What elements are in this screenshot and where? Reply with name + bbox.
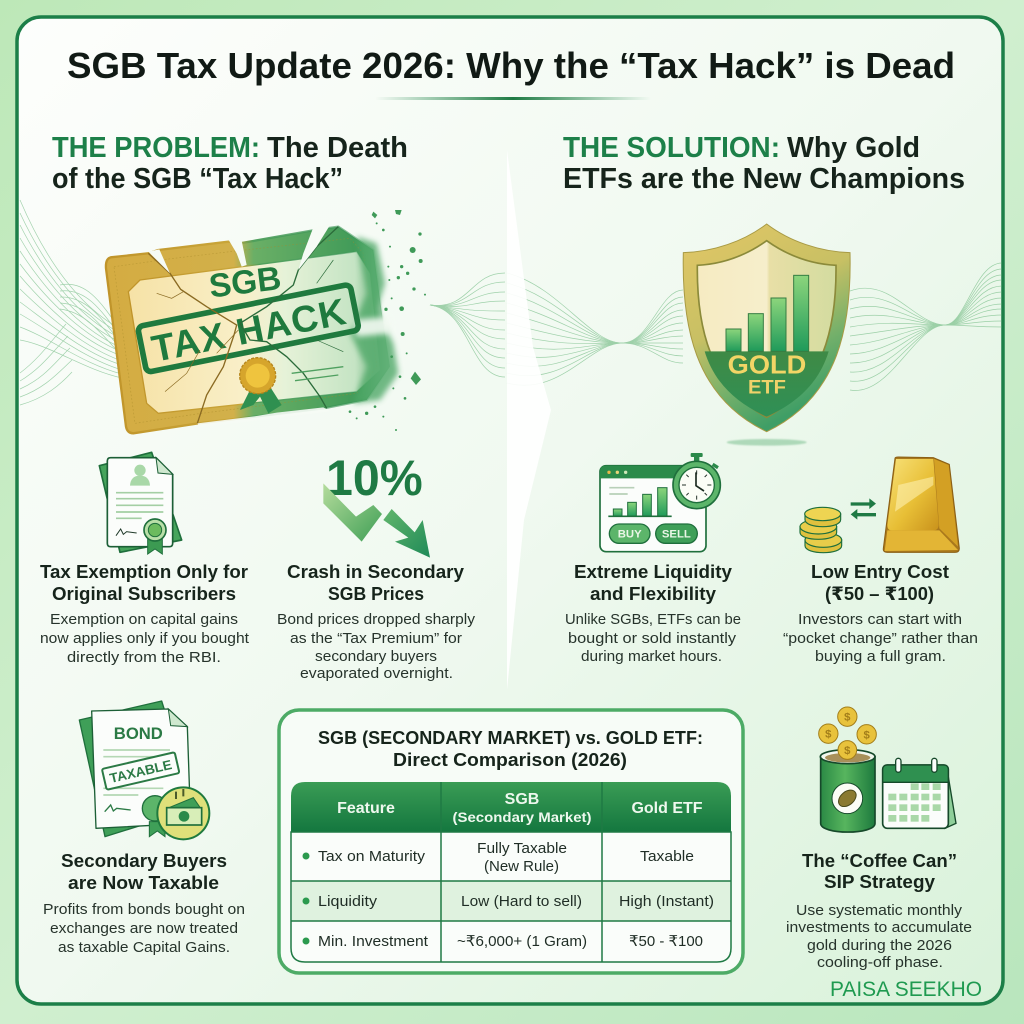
text: extreme liquidity bbox=[565, 561, 741, 665]
table row: liquidity: Low (Hard to sell) bbox=[461, 893, 582, 910]
text: crash in prices: secondary buyers bbox=[315, 649, 437, 665]
heading: the solution: THE SOLUTION: bbox=[563, 132, 780, 164]
icon: taxable bond: TAXABLE bbox=[108, 757, 173, 786]
text: tax exemption: Exemption on capital gains bbox=[50, 612, 238, 628]
text: secondary buyers: Profits from bonds bought on bbox=[43, 902, 245, 918]
icon: coffee can and calendar: $ bbox=[844, 745, 851, 757]
text: low entry cost: buying a full gram. bbox=[815, 649, 946, 665]
text: crash in prices: Bond prices dropped sharply bbox=[277, 612, 476, 628]
text: low entry cost: Low Entry Cost bbox=[811, 561, 949, 582]
icon: 10 percent crash bbox=[323, 450, 430, 558]
table row: min investment: Min. Investment bbox=[318, 933, 429, 950]
illustration: torn SGB tax hack certificate bbox=[106, 210, 426, 433]
title: SGB Tax Update 2026: Why the “Tax Hack” is Dead bbox=[67, 45, 955, 86]
shatter particles bbox=[349, 210, 426, 431]
table row: tax on maturity: Fully Taxable bbox=[477, 840, 567, 857]
table header row bbox=[291, 782, 731, 832]
text: tax exemption: now applies only if you bought bbox=[40, 631, 249, 647]
text: extreme liquidity: Extreme Liquidity bbox=[574, 561, 733, 582]
icon: 10 percent crash: 10% bbox=[326, 450, 423, 506]
text: tax exemption: Original Subscribers bbox=[52, 583, 236, 604]
icon: coins and gold bar bbox=[800, 457, 959, 553]
illustration: gold ETF shield: GOLD bbox=[728, 349, 806, 379]
text: coffee can SIP strategy: investments to accumulate bbox=[786, 920, 972, 936]
table row: liquidity bbox=[302, 893, 714, 910]
heading: the solution bbox=[563, 132, 965, 195]
icon: liquidity window with stopwatch bbox=[600, 453, 720, 552]
table title: SGB (SECONDARY MARKET) vs. GOLD ETF: bbox=[318, 728, 703, 748]
icon: coffee can and calendar bbox=[819, 707, 956, 832]
table body grid bbox=[291, 832, 731, 962]
text: extreme liquidity: bought or sold instantly bbox=[568, 631, 737, 647]
text: crash in prices bbox=[277, 561, 476, 682]
text: secondary buyers: as taxable Capital Gains. bbox=[58, 940, 230, 956]
text: tax exemption bbox=[40, 561, 249, 666]
text: secondary buyers: Secondary Buyers bbox=[61, 850, 227, 871]
text: low entry cost: Investors can start with bbox=[798, 612, 962, 628]
text: coffee can SIP strategy bbox=[786, 850, 972, 971]
text: coffee can SIP strategy: gold during the 2026 bbox=[807, 938, 952, 954]
illustration: gold ETF shield: ETF bbox=[748, 378, 786, 399]
table row: tax on maturity: (New Rule) bbox=[484, 858, 559, 875]
text: coffee can SIP strategy: SIP Strategy bbox=[824, 871, 936, 892]
icon: taxable bond bbox=[79, 701, 209, 839]
icon: coffee can and calendar: $ bbox=[864, 729, 871, 741]
table header labels: Feature bbox=[337, 800, 395, 817]
table row: min investment bbox=[302, 933, 703, 950]
table title bbox=[318, 728, 703, 770]
heading: the problem: The Death bbox=[267, 132, 408, 164]
text: extreme liquidity: Unlike SGBs, ETFs can be bbox=[565, 612, 741, 628]
icon: coffee can and calendar: $ bbox=[825, 729, 832, 741]
table header labels: Gold ETF bbox=[631, 800, 703, 817]
icon: exemption certificate bbox=[99, 452, 182, 554]
illustration: gold ETF shield bbox=[683, 224, 850, 446]
stamp: TAX HACK bbox=[148, 290, 349, 370]
icon: liquidity window with stopwatch: SELL bbox=[662, 528, 691, 540]
seal bbox=[240, 387, 282, 413]
table header labels: (Secondary Market) bbox=[452, 809, 592, 825]
text: crash in prices: as the “Tax Premium” for bbox=[290, 631, 462, 647]
text: extreme liquidity: and Flexibility bbox=[590, 583, 717, 604]
text: extreme liquidity: during market hours. bbox=[581, 649, 722, 665]
text: crash in prices: Crash in Secondary bbox=[287, 561, 465, 582]
heading: the problem bbox=[52, 132, 408, 195]
text: secondary buyers: exchanges are now treated bbox=[50, 921, 238, 937]
icon: liquidity window with stopwatch: BUY bbox=[618, 528, 642, 540]
heading: the problem: THE PROBLEM: bbox=[52, 132, 260, 164]
table title: Direct Comparison (2026) bbox=[393, 750, 627, 770]
text: secondary buyers bbox=[43, 850, 245, 956]
table header labels bbox=[337, 791, 703, 825]
illustration: torn SGB tax hack certificate: SGB bbox=[207, 260, 283, 306]
heading: the problem: of the SGB “Tax Hack” bbox=[52, 163, 343, 195]
panel: comparison table bbox=[279, 710, 743, 973]
dissolve cloud bbox=[350, 237, 398, 403]
text: coffee can SIP strategy: The “Coffee Can” bbox=[802, 850, 957, 871]
table header labels: SGB bbox=[505, 791, 539, 808]
cracks bbox=[148, 253, 237, 423]
text: tax exemption: directly from the RBI. bbox=[67, 650, 221, 666]
icon: taxable bond: BOND bbox=[114, 724, 163, 743]
icon: coffee can and calendar: $ bbox=[844, 712, 851, 724]
table row: tax on maturity: Tax on Maturity bbox=[318, 848, 426, 865]
background wave lines bbox=[20, 200, 1002, 405]
text: coffee can SIP strategy: Use systematic monthly bbox=[796, 903, 963, 919]
table row: tax on maturity bbox=[302, 840, 694, 875]
text: secondary buyers: are Now Taxable bbox=[68, 872, 219, 893]
text: crash in prices: evaporated overnight. bbox=[300, 666, 453, 682]
text: low entry cost: “pocket change” rather than bbox=[783, 631, 978, 647]
table row: min investment: ₹50 - ₹100 bbox=[629, 933, 703, 950]
brand logo text: PAISA SEEKHO bbox=[830, 978, 982, 1001]
text: crash in prices: SGB Prices bbox=[328, 583, 424, 604]
table row: liquidity: Liquidity bbox=[318, 893, 378, 910]
text: low entry cost: (₹50 – ₹100) bbox=[825, 583, 934, 604]
table row: liquidity: High (Instant) bbox=[619, 893, 714, 910]
text: low entry cost bbox=[783, 561, 978, 665]
table row: tax on maturity: Taxable bbox=[640, 848, 694, 865]
heading: the solution: Why Gold bbox=[787, 132, 920, 164]
heading: the solution: ETFs are the New Champions bbox=[563, 163, 965, 195]
table row: min investment: ~₹6,000+ (1 Gram) bbox=[457, 933, 587, 950]
center chevron divider bbox=[507, 150, 551, 690]
text: coffee can SIP strategy: cooling-off phase. bbox=[817, 955, 943, 971]
text: tax exemption: Tax Exemption Only for bbox=[40, 561, 248, 582]
